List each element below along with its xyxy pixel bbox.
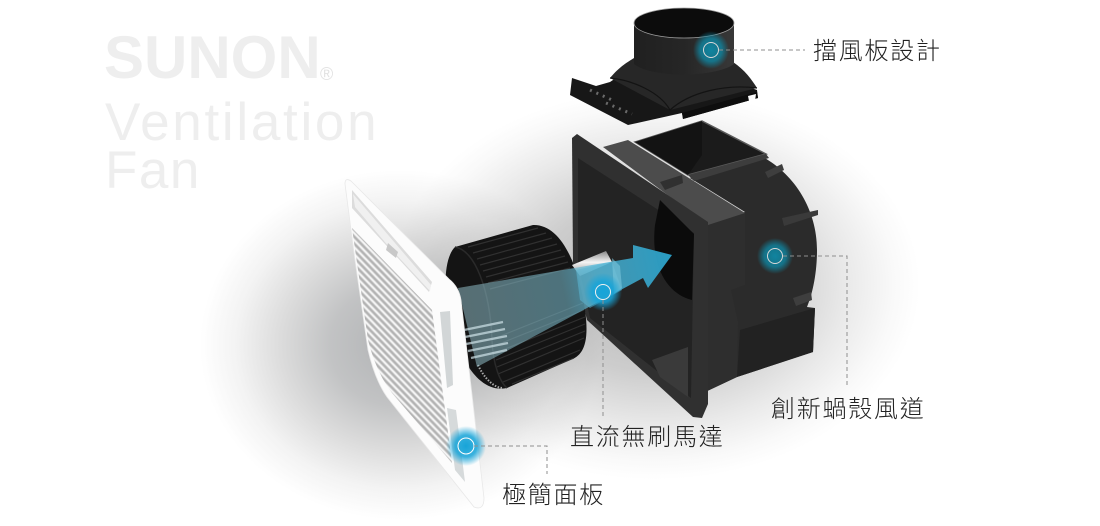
motor shaft [572,251,612,276]
brand logo text: Ventilation [105,93,379,152]
label: DC brushless motor: 直流無刷馬達 [570,424,724,451]
hotspot: housing [757,238,793,274]
brand logo text: Fan [105,141,201,200]
brand logo text [104,24,379,200]
label: minimal panel: 極簡面板 [502,482,605,509]
leader line: scroll housing [783,256,847,385]
label: scroll housing: 創新蝸殼風道 [771,396,926,423]
hotspot: motor [584,273,622,311]
main scroll housing [572,121,818,418]
hotspot: panel [446,426,486,466]
airflow arrow [458,245,672,367]
blower wheel [446,225,587,389]
hotspot: top duct [693,31,729,69]
leader line: panel [474,446,547,474]
background shadow [200,90,920,520]
brand logo text: SUNON [104,24,321,91]
leader line: baffle [719,49,805,51]
top duct connector [570,8,758,125]
label: baffle design: 擋風板設計 [813,38,942,65]
airflow stripes and motor body [464,258,622,358]
leader line: DC motor [602,300,604,419]
front grille panel [340,180,484,508]
brand logo text: ® [320,64,333,84]
